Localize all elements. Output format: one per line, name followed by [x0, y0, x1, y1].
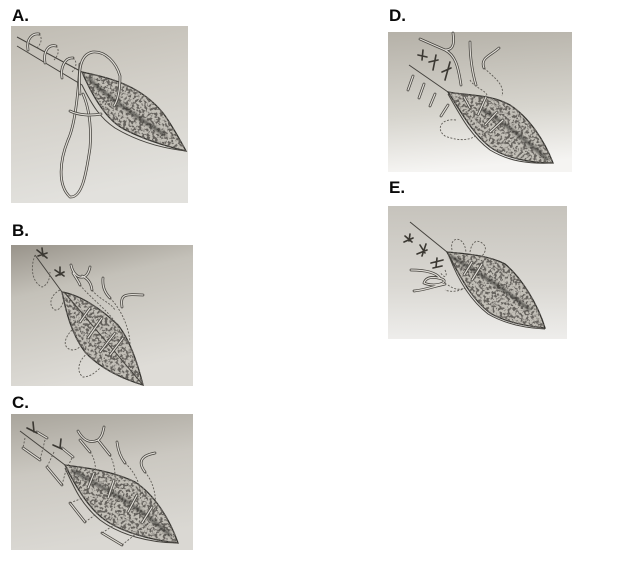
illustration E: [404, 222, 545, 329]
wound E: [447, 252, 545, 328]
incision line C: [20, 431, 178, 543]
panel B: interrupted sutures: [11, 221, 193, 386]
tied thread pair C: [78, 427, 110, 455]
upper loop A: [79, 52, 120, 106]
knots D: [418, 50, 451, 80]
knots C: [27, 422, 62, 449]
illustration A: [17, 34, 186, 197]
label E: E.: [389, 178, 405, 197]
panel E: near-complete closure: [388, 178, 567, 339]
label A: A.: [12, 6, 29, 25]
coils A: [28, 34, 73, 78]
knots E: [404, 234, 443, 268]
wound C: [65, 465, 178, 543]
stitches D: [464, 97, 503, 132]
knots B: [37, 248, 64, 276]
free threads C: [117, 442, 155, 472]
dashed threads D: [440, 68, 503, 140]
stitches C: [88, 473, 152, 523]
free threads B: [103, 278, 143, 307]
stitches E: [464, 262, 482, 280]
stitches B: [80, 308, 123, 355]
dashed loops E: [440, 239, 485, 291]
incision lines D: [409, 65, 553, 163]
photo background E: [388, 206, 567, 339]
photo background D: [388, 32, 572, 172]
illustration C: [20, 422, 178, 545]
tied threads D: [420, 33, 476, 85]
square stitches C: [23, 432, 122, 545]
dashed coil backs A: [37, 34, 76, 72]
wound D: [448, 92, 553, 163]
label B: B.: [12, 221, 29, 240]
loop thread A: [61, 64, 91, 197]
dashed loops B: [32, 255, 130, 377]
panel C: vertical mattress sutures: [11, 393, 193, 550]
panel D: mid-closure sutures: [388, 6, 572, 172]
dashed threads C: [23, 438, 155, 545]
photo background B: [11, 245, 193, 386]
panel A: running suture with loop: [11, 6, 188, 203]
tied threads E: [411, 270, 445, 291]
incision lines E: [410, 222, 545, 329]
tied thread pair B: [71, 265, 92, 290]
incision lines A: [17, 37, 186, 151]
photo background A: [11, 26, 188, 203]
label C: C.: [12, 393, 29, 412]
free thread D: [483, 48, 499, 68]
incision line B: [35, 255, 143, 385]
label D: D.: [389, 6, 406, 25]
illustration B: [32, 248, 143, 385]
illustration D: [408, 33, 553, 163]
dashes left D: [408, 76, 448, 116]
crossing stitch A: [70, 111, 101, 115]
photo background C: [11, 414, 193, 550]
wound A: [82, 72, 186, 151]
wound B: [62, 292, 143, 385]
